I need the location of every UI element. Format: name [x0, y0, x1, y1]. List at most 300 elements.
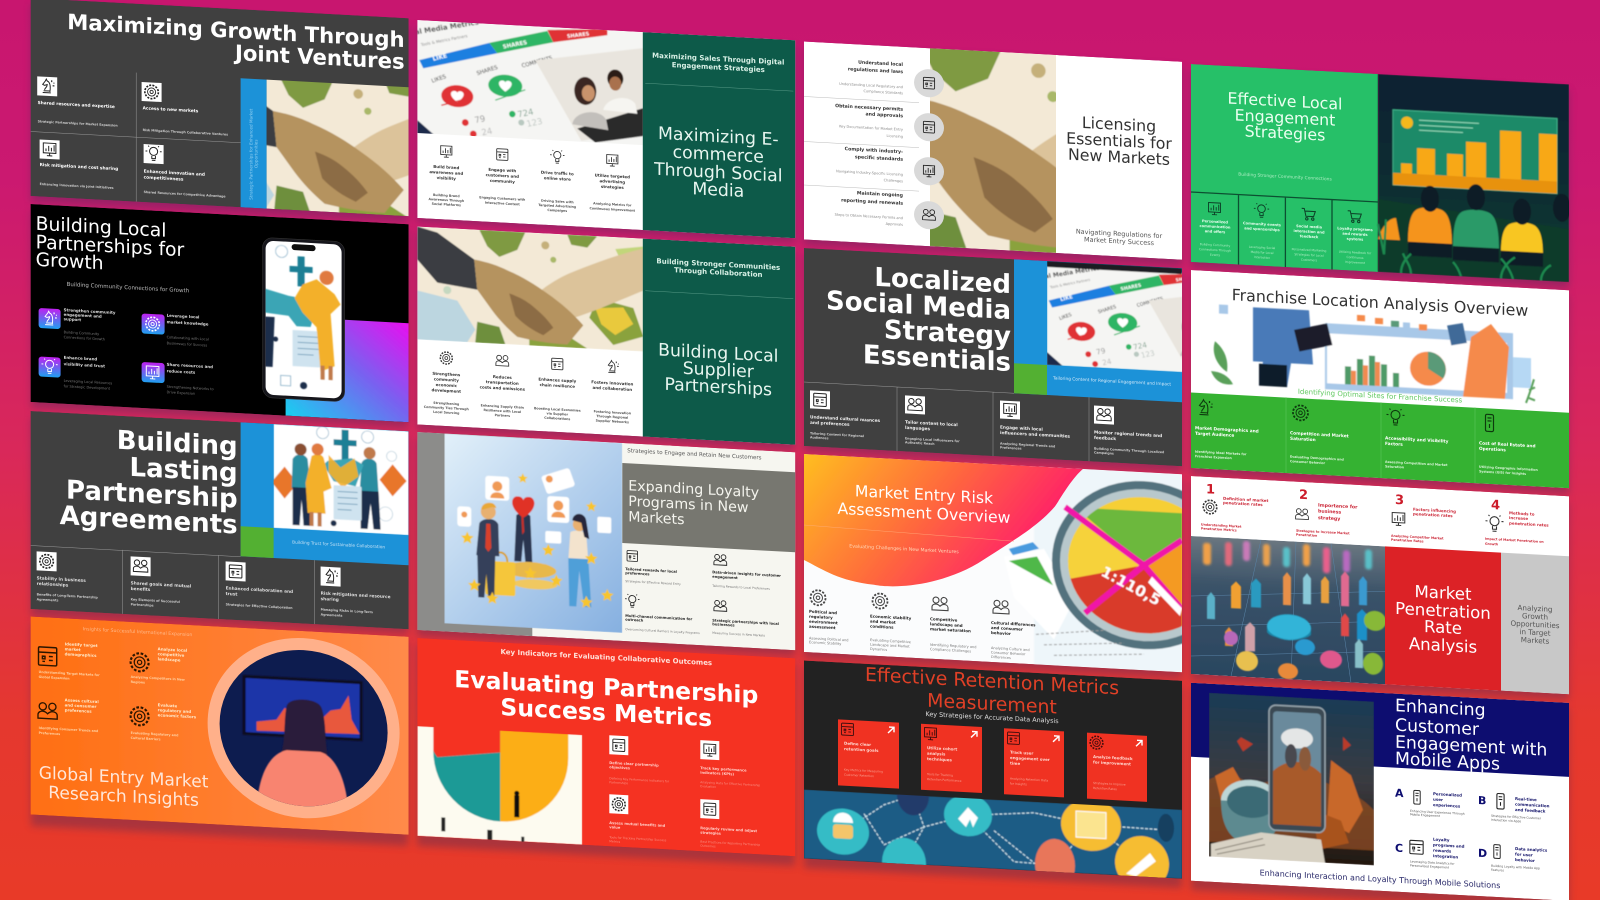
item: brand awareness: Social Platforms: [432, 202, 461, 207]
panel: white slide background: [417, 20, 795, 238]
item: strategic partnerships: Strategic partnerships with local: [712, 618, 779, 626]
item: permits: Key Documentation for Market Entry: [839, 124, 903, 132]
item: influencers: Analyzing Regional Trends and: [1000, 441, 1056, 448]
item: mutual benefits: Tools for Tracking Partnership Success: [608, 835, 667, 842]
item: strategic partnerships: [712, 600, 779, 638]
item: supply chain: Boosting Local Economies: [534, 406, 581, 413]
grey block: [417, 432, 532, 636]
item C: [1395, 835, 1465, 870]
image: risk gauge: 1:110,5: [1098, 563, 1164, 609]
title: Expanding Loyalty: [628, 478, 759, 501]
item: economic development: Strengthening: [433, 401, 460, 406]
item: stability: Agreements: [37, 597, 59, 602]
item: partnership objectives: Partnerships: [609, 780, 628, 785]
title: Global Entry Market: [39, 763, 209, 793]
panel: navy title band: [1191, 683, 1569, 777]
panel: white slide background: [804, 454, 1182, 672]
subtitle: Building Community Connections for Growth: [67, 281, 190, 295]
card: retention goals: Define clear: [844, 741, 871, 747]
title: Effective Local: [1228, 88, 1342, 114]
title: New Markets: [1068, 145, 1170, 169]
item: economic stability: and market: [870, 619, 896, 625]
item: competitive landscape: Compliance Challenges: [930, 647, 971, 653]
card: cohort analysis: Tools for Tracking: [926, 772, 953, 777]
card: cohort analysis: Utilize cohort: [927, 745, 957, 752]
title: Partnerships for: [36, 232, 185, 261]
item: enhanced innovation: Shared Resources for Competitive Advantage: [144, 190, 226, 198]
title: Evaluating Partnership: [454, 665, 758, 709]
subtitle: Analyzing: [1517, 603, 1553, 614]
slide: Enhancing Customer Engagement with Mobile Apps: [1191, 683, 1569, 900]
title: Rate: [1424, 617, 1462, 638]
item: cost of real estate: Operations: [1479, 446, 1506, 453]
item: cultural differences: and consumer: [991, 625, 1023, 632]
card: user engagement: for Insights: [1010, 782, 1027, 786]
item A: Enhancing User Experience Through: [1410, 809, 1465, 816]
item: shared resources: [37, 76, 118, 128]
image: abstract circle with figures: [417, 726, 582, 846]
item: competitive landscape: Competitive: [930, 616, 958, 623]
item D: D: [1478, 847, 1487, 860]
item 1: Understanding Market: [1201, 523, 1242, 529]
item: strategic partnerships: Measuring Success in New Markets: [712, 631, 765, 638]
item 2: business: [1318, 508, 1341, 516]
subtitle: Building Stronger Community Connections: [1238, 172, 1332, 183]
image: phone and cup: [1209, 693, 1374, 865]
item: data insights: Data-driven insights for customer: [712, 570, 781, 578]
item: cultural differences: Consumer Behavior: [991, 651, 1026, 656]
item: supply chain: chain resilience: [540, 382, 575, 389]
title: Franchise Location Analysis Overview: [1232, 285, 1528, 320]
item: cultural preferences: Assess cultural: [65, 697, 99, 704]
item: political environment: [809, 590, 849, 646]
item: loyalty programs: and rewards: [1342, 232, 1368, 237]
item: transportation costs: costs and emissions: [480, 384, 526, 392]
title: Essentials for: [1066, 129, 1172, 153]
item: brand awareness: Building Brand: [433, 193, 460, 198]
item: local languages: Tailor content to local: [905, 419, 958, 428]
title: Maximizing E-: [658, 124, 779, 150]
item: brand awareness: visibility: [437, 175, 456, 181]
item: demographics: Identifying Ideal Markets for: [1195, 450, 1247, 456]
image: loyalty illustration: [444, 433, 622, 633]
item: mutual benefits: value: [609, 825, 621, 830]
item: economic development: development: [432, 387, 461, 394]
item: competitive landscape: [130, 647, 187, 684]
image: analysts with charts: [1211, 304, 1535, 403]
item A: A: [1395, 787, 1404, 800]
item: social media interaction: interaction and: [1293, 229, 1325, 235]
item 2: Strategies to Increase Market: [1296, 529, 1350, 536]
item D: Building Loyalty with Mobile App: [1491, 864, 1540, 870]
subtitle: in Target: [1519, 627, 1551, 638]
item: economic development: community: [434, 376, 459, 383]
item: leverage market knowledge: [142, 311, 209, 348]
item: demographics: Target Audience: [1195, 431, 1234, 439]
item: community events: and sponsorships: [1244, 226, 1280, 232]
image: risk gauge: [1004, 465, 1236, 675]
item: standards: [836, 146, 944, 186]
item A: [1395, 787, 1465, 819]
title: Measurement: [927, 690, 1057, 719]
item A: Mobile Engagement: [1410, 812, 1441, 818]
title: Penetration: [1395, 599, 1491, 623]
card: cohort analysis: analysis: [927, 751, 946, 757]
item: personalized communication: Events: [1210, 253, 1221, 257]
item: transportation costs: Enhancing Supply Chain: [481, 403, 525, 410]
item: innovation: Fostering Innovation: [594, 409, 632, 415]
item C: Loyalty: [1433, 837, 1450, 843]
side strip: Strategic Partnerships for Enhanced Market: [249, 108, 254, 200]
item 3: Analyzing Competitor Market: [1391, 534, 1444, 541]
card: user engagement: Analyzing Retention Data: [1010, 777, 1048, 783]
item: innovation: Fosters innovation: [591, 379, 633, 387]
item: mutual benefits: Metrics: [609, 839, 621, 844]
item: local regulations: Compliance Standards: [864, 89, 903, 95]
card: user engagement: engagement over: [1010, 755, 1050, 762]
item 4: Growth: [1485, 542, 1499, 546]
item: targeted advertising: strategies: [601, 184, 624, 190]
item: access to new markets: Access to new markets: [143, 105, 199, 114]
item: loyalty programs: Utilizing Feedback for: [1339, 250, 1372, 255]
item: influencers: Preferences: [1000, 445, 1022, 451]
item 3: 3: [1395, 493, 1404, 508]
item: personalized communication: [1199, 202, 1231, 258]
item: partnership objectives: Define clear partnership: [609, 761, 659, 768]
item D: [1478, 844, 1548, 875]
item: competition: Evaluating Demographics and: [1290, 455, 1344, 462]
item B: communication: [1515, 802, 1550, 808]
item: regulatory factors: Evaluate: [158, 702, 177, 708]
item: competitive landscape: landscape: [158, 656, 181, 663]
item: cost of real estate: Cost of Real Estate and: [1479, 440, 1536, 449]
item A: user: [1433, 797, 1443, 802]
title: Enhancing: [1395, 696, 1486, 721]
item: cultural nuances: [810, 390, 881, 443]
title: commerce: [673, 143, 764, 168]
item: reporting: Approvals: [886, 222, 903, 227]
item: standards: Challenges: [884, 178, 903, 183]
item: reporting: Steps to Obtain Necessary Permits and: [835, 213, 903, 220]
item: engage customers: [479, 148, 526, 207]
item: cultural nuances: Tailoring Content for Regional: [810, 431, 864, 438]
gradient title shape: [804, 454, 1083, 597]
item: community events: Community events: [1243, 221, 1281, 227]
title: Joint Ventures: [233, 40, 405, 74]
title: Engagement: [1235, 105, 1335, 130]
item: leverage market knowledge: Collaborating with Local: [167, 335, 209, 342]
caption band text: Tailoring Content for Regional Engagement and Impact: [1052, 375, 1171, 388]
item: reporting: [835, 189, 944, 230]
item: accessibility: Accessibility and Visibility: [1385, 435, 1449, 445]
panel: white slide background: [1191, 476, 1569, 694]
title: Agreements: [60, 501, 238, 541]
title: Building Local: [658, 340, 778, 367]
item B: and feedback: [1515, 807, 1546, 814]
item: cultural differences: Cultural differences: [991, 620, 1036, 627]
item: shared goals: [131, 556, 192, 610]
item: economic development: economic: [436, 382, 458, 388]
item: standards: specific standards: [855, 154, 903, 163]
title: Building: [117, 426, 238, 462]
item: economic development: Strengthens: [432, 371, 461, 377]
card: retention goals: retention goals: [844, 746, 879, 753]
item: loyalty programs: [1337, 210, 1373, 265]
item 4: 4: [1491, 498, 1500, 514]
title: Engagement with: [1395, 733, 1547, 761]
title: Supplier: [683, 359, 755, 383]
item: competitive landscape: Analyze local: [158, 646, 188, 653]
item C: programs and: [1433, 842, 1465, 849]
panel: off-white slide background: [417, 432, 795, 650]
item: local regulations: Understanding Local Regulatory and: [839, 82, 903, 89]
item 3: [1391, 493, 1456, 545]
item: engage customers: Engage with: [488, 167, 516, 173]
item: stability: relationships: [37, 581, 69, 589]
item: risk mitigation: Agreements: [321, 613, 343, 618]
item: strengthen community: Building Community: [64, 330, 99, 336]
slide: Effective Retention Metrics Measurement: [804, 660, 1182, 900]
item: local languages: Authentic Reach: [905, 440, 935, 446]
image: 3D market pegs: [1191, 536, 1386, 684]
item: stability: [37, 551, 98, 605]
item A: experiences: [1433, 802, 1461, 809]
item: personalized communication: Building Community: [1200, 242, 1230, 248]
item: economic stability: [870, 593, 912, 653]
item: shared resources: Strategic Partnerships for Market Expansion: [38, 119, 118, 128]
item: regional trends: Building Community Through Localized: [1094, 447, 1165, 454]
slide: Effective Local Engagement Strategies: [1191, 64, 1571, 282]
item: partnership objectives: Defining Key Performance Indicators for: [609, 776, 670, 784]
panel: dark slide background: [804, 248, 1182, 466]
item: local languages: [905, 395, 960, 447]
item: permits: and approvals: [865, 111, 903, 119]
item: accessibility: Factors: [1385, 441, 1403, 448]
item: political environment: regulatory: [809, 614, 833, 620]
slide: Global Entry Market Research Insights: [31, 616, 409, 835]
item B: [1478, 792, 1550, 825]
item 4: penetration rates: [1509, 521, 1549, 528]
item: personalized communication: Connections Through: [1199, 247, 1231, 253]
item: leverage market knowledge: market knowledge: [167, 319, 209, 327]
slide: Building Lasting Partnership Agreements: [31, 411, 409, 629]
item: community events: [1243, 203, 1281, 261]
item 2: Penetration: [1296, 533, 1318, 538]
item: standards: Navigating Industry-Specific Licensing: [836, 169, 903, 177]
card: cohort analysis: [921, 724, 982, 793]
image: social media metrics: [1030, 260, 1241, 375]
item: regional trends: feedback: [1094, 435, 1116, 442]
item 1: Definition of market: [1223, 496, 1268, 503]
item: social media interaction: Strategies for Local: [1294, 252, 1324, 258]
title: Growth: [36, 250, 104, 274]
item: engage customers: Interactive Content: [485, 201, 520, 207]
image: social media metrics: [398, 14, 643, 147]
item: strategic partnerships: businesses: [712, 622, 735, 627]
item: transportation costs: Reduces: [493, 374, 512, 380]
item: regulatory factors: Evaluating Regulatory and: [131, 731, 179, 737]
item: risk mitigation: Enhancing Innovation via Joint Initiatives: [40, 182, 114, 190]
item: personalized communication: and offers: [1205, 229, 1225, 234]
subtitle: Navigating Regulations for: [1076, 228, 1163, 240]
panel: red slide background: [417, 638, 795, 856]
item: data insights: Tailoring Rewards to Local Preferences: [711, 584, 770, 591]
item: cultural nuances: and preferences: [810, 420, 850, 428]
item D: behavior: [1515, 857, 1535, 863]
item: economic stability: Evaluating Competitive: [870, 638, 911, 644]
item: permits: [835, 103, 944, 142]
item: enhance brand: [39, 353, 112, 391]
item C: C: [1395, 842, 1403, 855]
small heading: Through Collaboration: [674, 266, 763, 279]
item: engage customers: community: [490, 178, 515, 184]
item: leverage market knowledge: Leverage local: [167, 313, 200, 320]
item: economic stability: Economic stability: [870, 614, 912, 621]
panel: green title column: [643, 239, 795, 445]
slide: Evaluating Partnership Success Metrics: [417, 638, 795, 857]
subtitle: Opportunities: [1510, 619, 1560, 630]
item: targeted advertising: Utilize targeted: [595, 172, 630, 179]
item: mutual benefits: Assess mutual benefits and: [609, 821, 666, 828]
panel: red title block: [1385, 546, 1501, 691]
item: influencers: Engage with local: [1000, 424, 1043, 433]
item: strengthen community: support: [64, 316, 81, 322]
item: brand awareness: Awareness Through: [428, 197, 465, 203]
item: influencers: influencers and communities: [1000, 430, 1070, 440]
item: competition: Consumer Behavior: [1290, 459, 1326, 465]
panel: white slide background: [417, 226, 795, 445]
item: cultural differences: Analyzing Culture and: [991, 646, 1030, 652]
title: Effective Retention Metrics: [865, 664, 1119, 699]
side strip: Opportunities: [254, 139, 259, 168]
item: partnership objectives: objectives: [609, 765, 630, 770]
item: local regulations: [839, 59, 944, 98]
item: innovation: [591, 359, 633, 425]
item: reporting: reporting and renewals: [841, 197, 903, 207]
item: cultural differences: Differences: [991, 655, 1011, 660]
item: KPIs: Evaluation: [700, 784, 716, 789]
item: supply chain: via Supplier: [547, 411, 568, 417]
item: share resources: reduce costs: [167, 368, 196, 375]
item: loyalty programs: Continuous: [1347, 255, 1364, 260]
item: cultural nuances: Understand cultural nuances: [810, 414, 881, 424]
item: regulatory factors: regulatory and: [158, 707, 191, 714]
item: data insights: [711, 554, 781, 591]
item: targeted advertising: Continuous Improvement: [590, 206, 636, 213]
card: cohort analysis: Retention Performance: [927, 777, 962, 783]
item 2: [1296, 488, 1358, 540]
slide: Expanding Loyalty Programs in New Markets: [417, 432, 795, 650]
item: enhanced innovation: [144, 144, 226, 198]
item: competitive landscape: landscape and: [930, 621, 963, 628]
item A: Personalized: [1433, 791, 1462, 798]
card: retention goals: Customer Retention: [844, 773, 874, 778]
item: drive traffic: Drive traffic to: [541, 170, 574, 176]
title: Maximizing Growth Through: [67, 9, 405, 52]
item: drive traffic: online store: [544, 175, 571, 182]
title: Mobile Apps: [1395, 749, 1500, 775]
title: Strategies: [1245, 121, 1325, 145]
item: political environment: environment: [809, 619, 838, 625]
title: Market Entry Risk: [855, 481, 994, 508]
panel: dark slide background: [31, 411, 409, 629]
item: share resources: [142, 360, 214, 397]
colour blocks: [241, 422, 409, 565]
title: Success Metrics: [500, 693, 712, 732]
item: collaboration: [226, 561, 293, 610]
item: enhanced innovation: Enhanced innovation and: [144, 169, 205, 178]
panel: green title column: [643, 32, 795, 238]
item C: rewards: [1433, 848, 1452, 854]
item: competitive landscape: Analyzing Competitors in New: [131, 675, 185, 682]
title: Strategy: [884, 315, 1011, 352]
item: review strategies: Regularly review and adjust: [700, 826, 757, 833]
item: transportation costs: Partners: [495, 413, 510, 418]
item: accessibility: Assessing Competition and Market: [1385, 460, 1448, 467]
item: drive traffic: [538, 149, 577, 214]
slide: Franchise Location Analysis Overview: [1191, 270, 1569, 488]
title: Analysis: [1409, 634, 1477, 657]
item: competitive landscape: competitive: [158, 651, 185, 658]
item: stability: Benefits of Long-Term Partnership: [37, 592, 98, 600]
card: cohort analysis: techniques: [927, 756, 952, 762]
subtitle: Strategies to Engage and Retain New Customers: [627, 447, 762, 461]
slide: Market Entry Risk Assessment Overview: [804, 454, 1236, 675]
item: loyalty programs: Loyalty programs: [1337, 226, 1373, 232]
item: cost of real estate: Utilizing Geographic Information: [1479, 465, 1538, 472]
subtitle: Evaluating Challenges in New Market Ventures: [849, 543, 959, 555]
card: analyze feedback: Strategies to Improve: [1093, 781, 1126, 787]
item: supply chain: Collaborations: [544, 416, 570, 421]
item 4: Methods to: [1509, 510, 1535, 517]
item: access to new markets: Risk Mitigation Through Collaborative Ventures: [143, 128, 228, 137]
item: multi-channel: Overcoming Cultural Barriers in Loyalty Programs: [625, 627, 700, 635]
item: review strategies: [700, 799, 760, 851]
title: Assessment Overview: [838, 499, 1011, 527]
title: Lasting: [130, 453, 238, 489]
title: Social Media: [826, 286, 1011, 326]
item: regulatory factors: [130, 703, 196, 740]
item: reporting: Maintain ongoing: [857, 190, 903, 199]
title: Media: [692, 179, 744, 202]
item: shared resources: Shared resources and expertise: [38, 100, 115, 110]
panel: orange slide background: [31, 616, 409, 835]
panel: dark slide background: [804, 660, 1182, 879]
item 1: penetration rates: [1223, 500, 1263, 507]
item: community events: Leveraging Social: [1249, 245, 1275, 250]
item: tailored rewards: preferences: [625, 571, 650, 576]
item: political environment: Assessing Political and: [809, 636, 849, 642]
item: competitive landscape: Regions: [131, 680, 145, 685]
subtitle: Growth: [1522, 611, 1548, 622]
gradient corner panel: [286, 317, 409, 422]
card: analyze feedback: Analyze feedback: [1093, 754, 1133, 761]
item: brand awareness: [428, 145, 465, 208]
title: Partnership: [66, 475, 238, 515]
image: handshake over map: [266, 80, 409, 216]
item: innovation: Through Regional: [596, 414, 628, 420]
item: competitive landscape: Identifying Regulatory and: [930, 643, 976, 649]
item: economic development: [424, 351, 470, 416]
item: enhanced innovation: competitiveness: [144, 175, 184, 183]
item: multi-channel: outreach: [625, 618, 644, 623]
item: political environment: assessment: [809, 624, 836, 630]
item: cultural preferences: Identifying Consumer Trends and: [39, 726, 99, 733]
item C: Leveraging Data Analytics for: [1410, 859, 1455, 866]
title: Customer: [1395, 716, 1480, 740]
item: economic development: Community Ties Through: [424, 405, 470, 411]
item: demographics: Franchise Expansion: [1195, 454, 1232, 460]
